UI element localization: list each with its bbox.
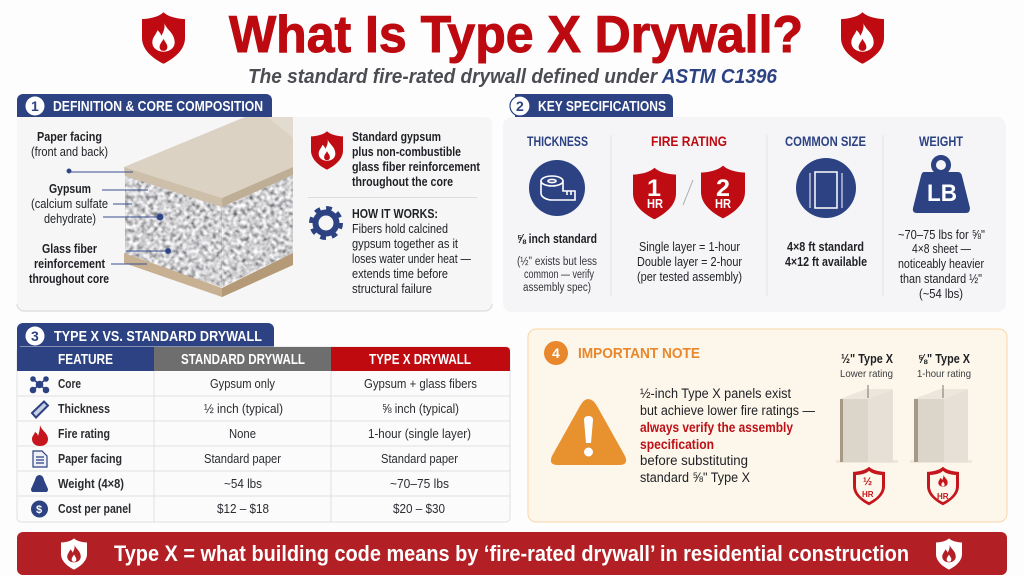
row: core <box>30 377 477 392</box>
icon: 2 hour shield: HR <box>715 197 731 211</box>
note text: before substituting <box>640 453 748 468</box>
spec: thickness: common — verify <box>524 269 594 281</box>
icon: 1 hour shield <box>633 168 676 219</box>
icon: flame <box>32 425 48 446</box>
icon: left fire shield <box>142 12 185 64</box>
how it works text: gypsum together as it <box>352 237 458 251</box>
section tab 3 <box>17 323 274 347</box>
spec: thickness <box>517 133 597 294</box>
spec: fire rating <box>633 133 745 284</box>
five eighths inch panel: ⅝" Type X <box>918 352 971 366</box>
icon: tape measure <box>529 160 585 216</box>
section tab 1 <box>17 94 272 117</box>
how it works text: extends time before <box>352 267 448 281</box>
row: weight <box>31 475 449 492</box>
panel: definition and core composition <box>17 94 492 311</box>
table header: TYPE X DRYWALL <box>369 352 471 368</box>
icon: warning triangle <box>551 399 626 465</box>
banner text: Type X = what building code means by ‘fire-rated drywall’ in residential construction <box>114 541 909 566</box>
row: core: Gypsum only <box>210 377 276 391</box>
note text: ½-inch Type X panels exist <box>640 386 791 401</box>
composition labels: reinforcement <box>34 257 106 271</box>
spec: weight: ~70–75 lbs for ⅝" <box>898 228 985 242</box>
row: cost: Cost per panel <box>58 502 131 516</box>
icon: 2 hour shield <box>701 166 745 218</box>
row: thickness: ½ inch (typical) <box>204 402 283 416</box>
spec: common size: 4×12 ft available <box>785 255 867 269</box>
spec: thickness: ⅝ inch standard <box>517 231 597 246</box>
five eighths inch panel <box>910 352 972 505</box>
spec: fire rating: FIRE RATING <box>651 133 727 149</box>
composition labels: Gypsum <box>49 182 91 196</box>
spec: weight: 4×8 sheet — <box>912 242 971 256</box>
section tab 2 <box>510 94 673 117</box>
icon: molecule <box>30 377 48 392</box>
row: paper facing: Standard paper <box>204 452 281 466</box>
spec: thickness: assembly spec) <box>523 282 591 294</box>
row: fire rating: None <box>229 427 256 441</box>
note text: always verify the assembly <box>640 420 793 435</box>
row: paper facing: Standard paper <box>381 452 458 466</box>
spec: fire rating: Double layer = 2-hour <box>637 255 742 269</box>
icon: half hour shield: ½ <box>863 476 872 488</box>
section tab 2: 2 <box>516 98 524 114</box>
icon: banner shield right <box>936 538 962 570</box>
drywall cross-section image <box>124 117 293 297</box>
table header: STANDARD DRYWALL <box>181 352 305 368</box>
callout banner <box>17 532 1007 575</box>
row: core: Gypsum + glass fibers <box>364 377 477 391</box>
spec: weight: WEIGHT <box>919 133 963 149</box>
composition labels: (front and back) <box>31 145 108 159</box>
icon: fire shield <box>311 131 343 170</box>
row: cost: $12 – $18 <box>217 502 269 516</box>
section tab 2: KEY SPECIFICATIONS <box>538 99 666 115</box>
icon: 2 hour shield: 2 <box>716 175 730 202</box>
leader lines <box>67 169 170 264</box>
spec: fire rating: (per tested assembly) <box>637 270 742 284</box>
panel: key specifications <box>503 94 1006 312</box>
icon: panel size <box>796 158 856 218</box>
composition labels <box>29 130 109 286</box>
spec: common size <box>785 133 867 269</box>
how it works text: structural failure <box>352 282 432 296</box>
icon: one hour flame shield <box>927 467 959 505</box>
row: paper facing <box>33 451 458 467</box>
section tab 3: 3 <box>31 328 39 344</box>
spec: common size: 4×8 ft standard <box>787 240 864 254</box>
row: weight: ~54 lbs <box>224 477 262 491</box>
composition statement <box>352 130 481 189</box>
half inch panel: ½" Type X <box>841 352 894 366</box>
section heading 4 <box>544 341 700 365</box>
row: fire rating: Fire rating <box>58 427 110 441</box>
row: paper facing: Paper facing <box>58 452 122 466</box>
icon: 1 hour shield: HR <box>647 197 663 211</box>
panel: comparison table <box>17 323 510 522</box>
title <box>142 6 884 64</box>
row: cost <box>31 500 445 518</box>
spec: thickness: THICKNESS <box>527 133 588 149</box>
composition statement: glass fiber reinforcement <box>352 160 481 174</box>
row: thickness <box>32 402 459 418</box>
note text: but achieve lower fire ratings — <box>640 403 815 418</box>
icon: LB weight: LB <box>927 180 957 207</box>
row: fire rating <box>32 425 471 446</box>
composition labels: throughout core <box>29 272 109 286</box>
icon: half hour shield <box>853 467 885 505</box>
table header <box>17 347 510 371</box>
icon: right fire shield <box>841 12 884 64</box>
icon: dollar coin <box>31 500 48 518</box>
composition statement: throughout the core <box>352 175 453 189</box>
spec: weight: noticeably heavier <box>898 257 984 271</box>
spec: weight: (~54 lbs) <box>919 287 963 301</box>
composition statement: plus non-combustible <box>352 145 461 159</box>
composition labels: Paper facing <box>37 130 102 144</box>
title text: What Is Type X Drywall? <box>229 6 803 64</box>
five eighths inch panel: 1-hour rating <box>917 368 971 380</box>
section heading 4: 4 <box>552 345 560 361</box>
icon: document <box>33 451 47 467</box>
half inch panel <box>836 352 898 505</box>
spec: weight <box>898 133 985 301</box>
spec: thickness: (½" exists but less <box>517 256 597 268</box>
icon: weight <box>31 475 48 492</box>
row: weight: ~70–75 lbs <box>390 477 449 491</box>
how it works text: HOW IT WORKS: <box>352 207 438 221</box>
row: thickness: ⅝ inch (typical) <box>382 402 459 416</box>
how it works text <box>352 207 471 296</box>
section tab 1: DEFINITION & CORE COMPOSITION <box>53 99 263 115</box>
note text: standard ⅝" Type X <box>640 470 750 485</box>
note text: specification <box>640 437 714 452</box>
spec: fire rating: Single layer = 1-hour <box>639 240 740 254</box>
subtitle: The standard fire-rated drywall defined under ASTM C1396 <box>248 66 778 88</box>
how it works text: loses water under heat — <box>352 252 471 266</box>
icon: banner shield left <box>61 538 87 570</box>
section heading 4: IMPORTANT NOTE <box>578 346 700 362</box>
panel: important note <box>528 329 1007 522</box>
table header: FEATURE <box>58 352 113 368</box>
spec: common size: COMMON SIZE <box>785 133 866 149</box>
row: fire rating: 1-hour (single layer) <box>368 427 471 441</box>
composition labels: Glass fiber <box>42 242 97 256</box>
composition statement: Standard gypsum <box>352 130 441 144</box>
icon: half hour shield: HR <box>862 490 874 499</box>
section tab 1: 1 <box>31 98 39 114</box>
row: weight: Weight (4×8) <box>58 477 124 491</box>
icon: ruler <box>32 402 48 418</box>
how it works text: Fibers hold calcined <box>352 222 448 236</box>
icon: one hour flame shield: HR <box>937 492 949 501</box>
icon: 1 hour shield: 1 <box>647 175 661 202</box>
note text <box>640 386 815 485</box>
row: cost: $20 – $30 <box>393 502 445 516</box>
composition labels: dehydrate) <box>44 212 96 226</box>
row: core: Core <box>58 377 81 391</box>
composition labels: (calcium sulfate <box>31 197 108 211</box>
row: thickness: Thickness <box>58 402 110 416</box>
icon: LB weight <box>913 158 970 213</box>
section tab 3: TYPE X VS. STANDARD DRYWALL <box>54 329 262 345</box>
icon: dollar coin: $ <box>36 504 42 516</box>
half inch panel: Lower rating <box>840 368 893 380</box>
icon: gear <box>311 208 341 238</box>
spec: weight: than standard ½" <box>900 272 982 286</box>
